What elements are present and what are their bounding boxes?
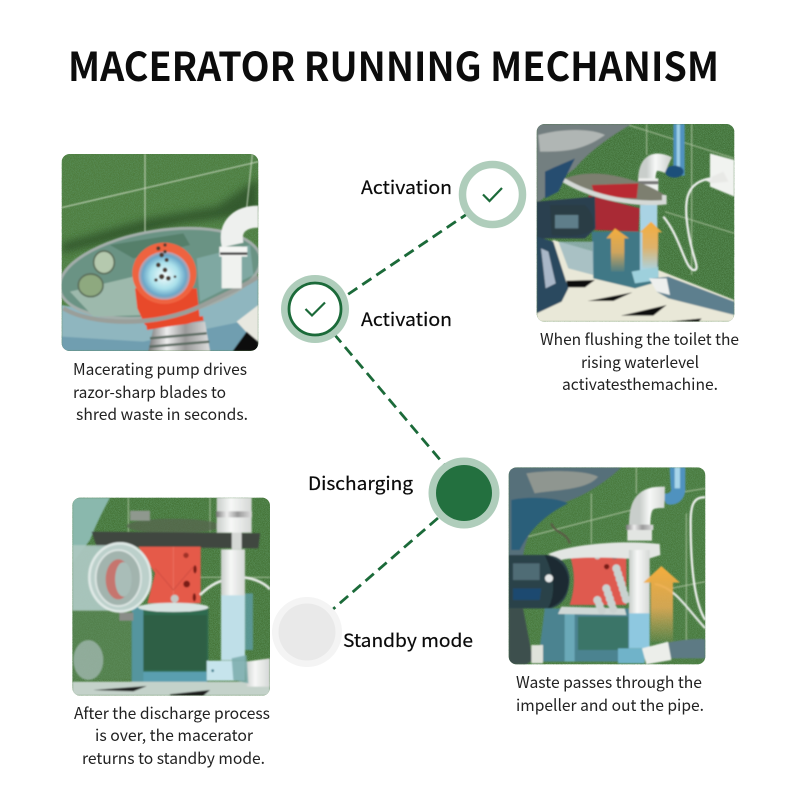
step node: discharging: [428, 458, 500, 528]
caption: waste passes: [516, 669, 704, 716]
caption: flushing the toilet: When flushing the toilet the: [540, 326, 739, 350]
caption: waste passes: Waste passes through the: [516, 669, 702, 693]
caption: macerating pump: Macerating pump drives: [73, 356, 247, 380]
caption: macerating pump: [73, 356, 248, 425]
caption: after discharge: [74, 700, 270, 769]
caption: macerating pump: razor-sharp blades to: [73, 379, 226, 403]
connector: activation to activation: [347, 212, 470, 295]
connector: activation to discharging: [334, 334, 447, 468]
caption: flushing the toilet: rising waterlevel: [581, 349, 699, 373]
photo: waste through impeller: [509, 467, 705, 664]
photo: standby macerator: [72, 498, 270, 696]
caption: after discharge: is over, the macerator: [95, 722, 254, 746]
caption: macerating pump: shred waste in seconds.: [76, 401, 248, 425]
caption: flushing the toilet: activatesthemachine.: [562, 371, 718, 395]
label: standby mode: Standby mode: [343, 627, 473, 653]
connector: discharging to standby: [332, 518, 438, 610]
photo: rising water level: [537, 124, 734, 322]
step node: standby: [272, 597, 342, 667]
step node: activation upper: [462, 164, 522, 224]
caption: after discharge: returns to standby mode.: [82, 745, 265, 769]
label: activation lower: Activation: [361, 306, 452, 332]
label: activation upper: Activation: [361, 174, 452, 200]
step node: activation lower: [281, 275, 349, 343]
photo: macerating pump top view: [53, 154, 267, 351]
title: MACERATOR RUNNING MECHANISM: [68, 35, 719, 93]
caption: waste passes: impeller and out the pipe.: [516, 692, 704, 716]
label: discharging: Discharging: [308, 470, 414, 496]
caption: after discharge: After the discharge process: [74, 700, 270, 724]
caption: flushing the toilet: [540, 326, 739, 395]
